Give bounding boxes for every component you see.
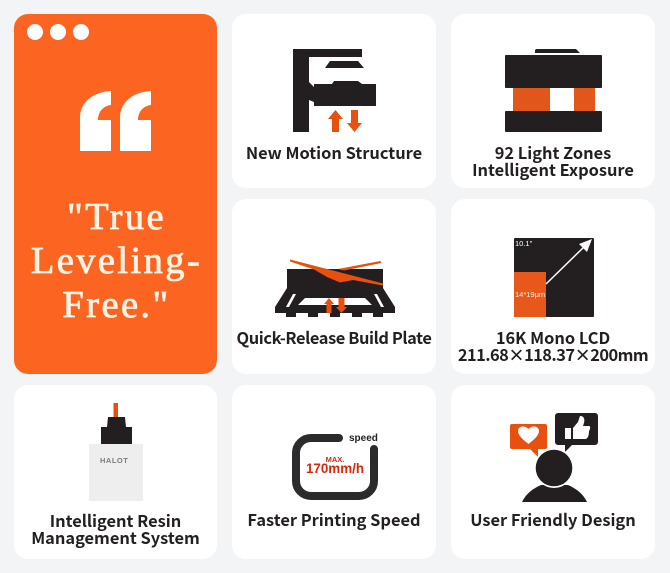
label: Quick-Release Build Plate <box>237 325 431 349</box>
label <box>31 508 200 549</box>
icon: speed gauge: MAX. <box>326 455 344 464</box>
icon: speed gauge: 170mm/h <box>306 461 364 476</box>
icon: resin bottle <box>89 403 143 501</box>
label: Management System <box>31 525 200 549</box>
label <box>458 325 648 366</box>
icon: LCD screen: 14*19μm <box>515 290 545 299</box>
label: Intelligent Exposure <box>472 157 634 181</box>
label: Intelligent Resin <box>50 508 181 532</box>
panel: intelligent resin management <box>14 385 217 559</box>
quote text: Free." <box>62 284 171 326</box>
panel: faster printing speed <box>232 385 436 559</box>
label: 92 Light Zones <box>495 140 611 164</box>
label: 211.68×118.37×200mm <box>458 342 648 366</box>
quote text <box>31 196 202 326</box>
quote text: "True <box>67 196 166 238</box>
panel: quote <box>14 14 217 374</box>
icon: LCD screen <box>514 238 594 317</box>
label <box>472 140 634 181</box>
icon: resin bottle: HALOT <box>100 456 128 465</box>
label: Faster Printing Speed <box>247 507 421 531</box>
icon: quotation marks <box>80 91 151 151</box>
label: User Friendly Design <box>470 507 636 531</box>
icon: light zones <box>505 49 602 132</box>
icon: motion structure <box>293 49 376 132</box>
panel: user friendly design <box>451 385 655 559</box>
label: 16K Mono LCD <box>496 325 610 349</box>
panel: 16K mono LCD <box>451 199 655 374</box>
panel: quick-release build plate <box>232 199 436 374</box>
window dots <box>27 24 89 40</box>
panel: 92 light zones <box>451 14 655 188</box>
icon: speed gauge: speed <box>349 433 378 444</box>
quote text: Leveling- <box>31 240 202 282</box>
icon: LCD screen: 10.1" <box>515 239 533 248</box>
icon: speed gauge <box>292 433 378 500</box>
icon: build plate <box>275 260 395 317</box>
icon: user with reactions <box>510 413 598 502</box>
label: New Motion Structure <box>246 140 422 164</box>
panel: new motion structure <box>232 14 436 188</box>
